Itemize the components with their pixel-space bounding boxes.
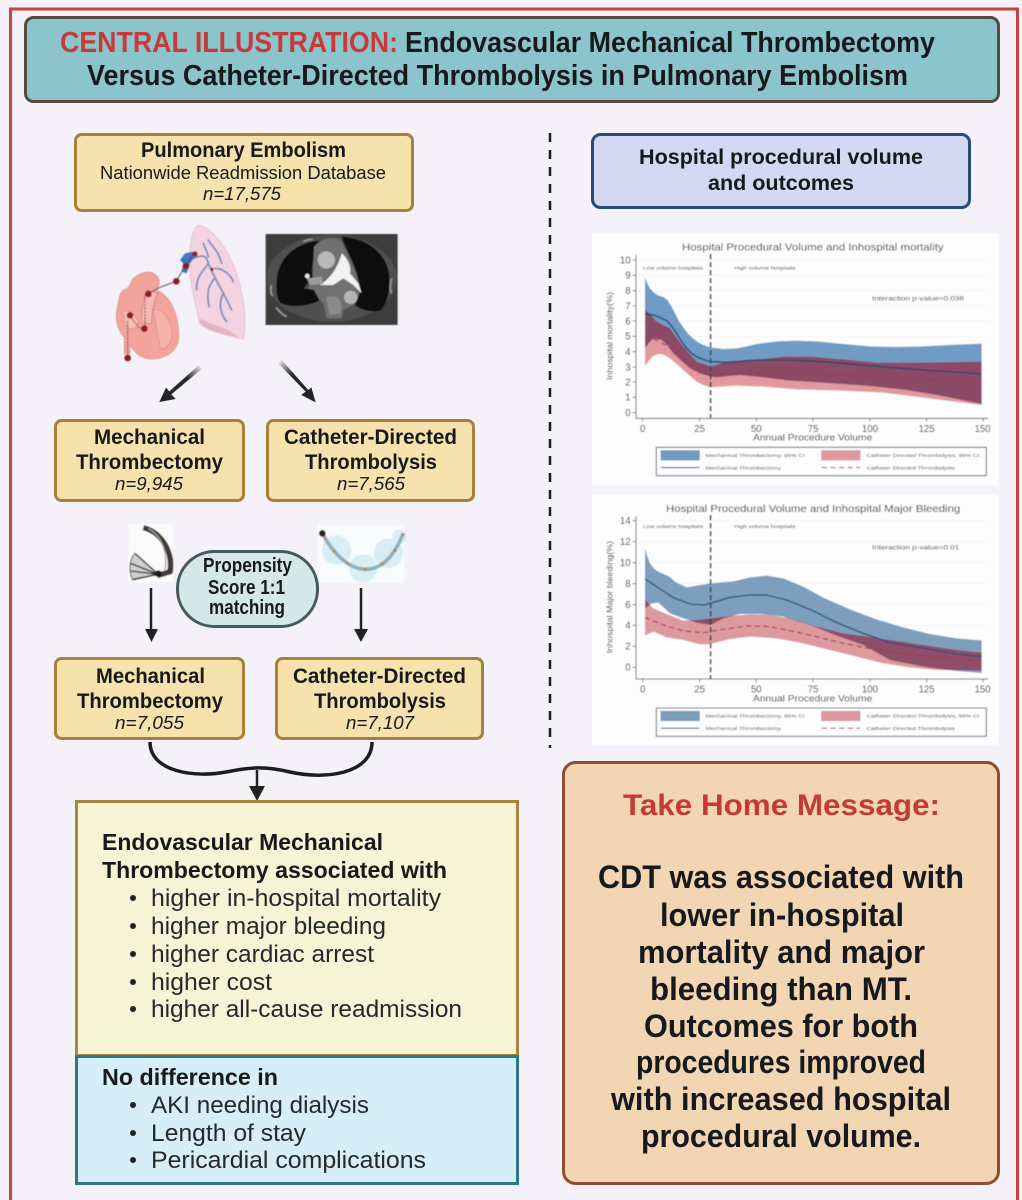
box: matched mechanical thrombectomy: Thrombectomy [77,690,223,713]
chart: inhospital mortality: Annual Procedure Volume [753,433,872,443]
chart: inhospital major bleeding: Low volume hospitals [643,524,704,530]
callout: propensity score matching: Propensity [203,555,293,577]
box: matched catheter-directed thrombolysis: n=7,107 [346,713,415,733]
panel: take home message: Outcomes for both [644,1008,918,1044]
axes: 4 [625,347,631,358]
band overlap [644,600,982,672]
panel: take home message: CDT was associated with [598,859,964,895]
axes: 9 [625,271,631,282]
image: CT scan [266,234,398,325]
panel: pulmonary embolism cohort: Nationwide Readmission Database [100,163,386,183]
confidence band: mechanical thrombectomy [645,548,982,673]
panel: mechanical thrombectomy findings [76,802,518,1056]
box: catheter-directed thrombolysis before matching: Thrombolysis [305,451,437,474]
panel: pulmonary embolism cohort [76,134,412,210]
legend: Catheter Directed Thrombolysis [867,465,956,471]
title banner: Versus Catheter-Directed Thrombolysis in Pulmonary Embolism [87,60,908,92]
legend: Catheter Directed Thrombolysis [867,726,956,732]
confidence band: catheter directed thrombolysis [645,309,982,405]
title banner [26,18,998,102]
chart: inhospital mortality [592,233,999,485]
panel: take home message: lower in-hospital [660,897,904,933]
box: catheter-directed thrombolysis before matching: n=7,565 [337,474,406,494]
line: catheter directed thrombolysis [645,617,982,661]
box: matched mechanical thrombectomy [56,658,244,738]
panel: no difference findings: Pericardial complications [151,1147,426,1174]
panel: mechanical thrombectomy findings: higher all-cause readmission [151,996,462,1023]
chart: inhospital mortality: Low volume hospitals [643,266,704,272]
panel: pulmonary embolism cohort: n=17,575 [203,184,282,204]
box: mechanical thrombectomy before matching [56,420,244,500]
axes: 0 [640,685,645,696]
panel: take home message: mortality and major [638,934,925,970]
arrow: merge connector [150,742,372,801]
axes: 12 [620,537,631,548]
axes: 5 [625,332,631,343]
confidence band: mechanical thrombectomy [645,278,982,404]
axes: 3 [625,362,631,373]
icon: heart and lung with embolus [116,225,245,361]
axes: 50 [751,685,762,696]
arrow: to catheter-directed thrombolysis [278,360,316,402]
arrow: to mechanical thrombectomy [159,365,202,402]
axes: 2 [625,642,631,653]
chart: inhospital major bleeding: Hospital Procedural Volume and Inhospital Major Bleeding [666,504,960,515]
icon: thrombectomy device [128,524,173,582]
axes: 125 [919,424,935,435]
axes: 100 [862,685,878,696]
axes: 10 [620,255,631,266]
chart: inhospital major bleeding: Interaction p-value=0.01 [872,545,960,551]
box: catheter-directed thrombolysis before matching [268,420,474,500]
confidence band: catheter directed thrombolysis [645,599,982,671]
callout: propensity score matching: Score 1:1 [208,577,285,599]
panel: no difference findings: Length of stay [151,1120,306,1147]
legend: Mechanical Thrombectomy [706,465,782,471]
panel: mechanical thrombectomy findings: higher major bleeding [151,913,386,940]
line: mechanical thrombectomy [645,313,982,374]
axes: 6 [625,316,631,327]
axes: 1 [625,393,631,404]
box: matched catheter-directed thrombolysis: Thrombolysis [314,690,446,713]
chart: inhospital major bleeding: High volume hospitals [734,524,796,530]
chart: inhospital major bleeding [592,494,999,746]
box: matched catheter-directed thrombolysis: Catheter-Directed [293,665,466,688]
panel: no difference findings: No difference in [102,1064,278,1090]
box: catheter-directed thrombolysis before matching: Catheter-Directed [284,426,457,449]
box: matched catheter-directed thrombolysis [276,658,482,738]
chart: inhospital major bleeding: Annual Procedure Volume [753,693,872,703]
axes: 125 [919,685,935,696]
heading: hospital procedural volume: and outcomes [708,172,854,195]
panel: take home message: procedures improved [636,1044,926,1080]
legend: Catheter Directed Thrombolysis, 95% CI [867,453,979,459]
axes: 100 [862,424,878,435]
panel: pulmonary embolism cohort: Pulmonary Embolism [141,139,346,162]
legend: Mechanical Thrombectomy, 95% CI [706,714,805,720]
line: mechanical thrombectomy [645,579,982,657]
axes: 14 [620,516,631,527]
axes: 0 [625,408,631,419]
panel: mechanical thrombectomy findings: higher cost [151,969,272,996]
axes: 75 [808,424,818,435]
axes: 8 [625,579,631,590]
axes: 10 [620,558,631,569]
axes: 25 [694,424,705,435]
axes: 150 [975,685,991,696]
axes: 50 [751,424,762,435]
chart: inhospital major bleeding: Inhospital Major bleeding(%) [605,541,615,653]
panel: mechanical thrombectomy findings: higher cardiac arrest [151,941,374,968]
axes: 75 [808,685,818,696]
legend [656,447,986,476]
axes: 25 [694,685,705,696]
panel: take home message [564,762,998,1184]
legend: Mechanical Thrombectomy, 95% CI [706,453,805,459]
axes [620,516,991,696]
heading: hospital procedural volume [592,134,970,208]
chart: inhospital mortality: High volume hospitals [734,266,796,272]
line: catheter directed thrombolysis [645,337,982,383]
arrow: thrombolysis down [354,588,368,642]
title banner: CENTRAL ILLUSTRATION: [60,27,398,59]
box: mechanical thrombectomy before matching: Thrombectomy [76,451,223,474]
axes: 8 [625,286,631,297]
axes: 150 [975,424,991,435]
box: mechanical thrombectomy before matching: Mechanical [94,426,205,449]
panel: no difference findings: AKI needing dialysis [151,1092,369,1119]
chart: inhospital mortality: Inhospital mortality(%) [605,292,615,380]
panel: no difference findings [76,1056,518,1184]
axes: 2 [625,377,631,388]
title banner: Endovascular Mechanical Thrombectomy [405,27,935,59]
chart: inhospital mortality: Hospital Procedural Volume and Inhospital mortality [682,243,944,254]
heading: hospital procedural volume: Hospital procedural volume [639,146,923,169]
panel: take home message: bleeding than MT. [650,971,912,1007]
band overlap [644,310,982,404]
panel: mechanical thrombectomy findings: higher in-hospital mortality [151,885,441,912]
arrow: thrombectomy down [145,588,158,642]
axes: 7 [625,301,631,312]
axes: 0 [640,424,645,435]
legend: Catheter Directed Thrombolysis, 95% CI [867,714,979,720]
legend [656,708,986,736]
callout: propensity score matching: matching [209,597,285,619]
legend: Mechanical Thrombectomy [706,726,782,732]
axes: 6 [625,600,631,611]
axes [620,255,991,435]
panel: mechanical thrombectomy findings: Thrombectomy associated with [102,857,447,883]
panel: take home message: procedural volume. [641,1118,921,1154]
chart: inhospital mortality: Interaction p-value=0.038 [872,297,965,303]
panel: take home message: with increased hospital [610,1081,951,1117]
axes: 4 [625,621,631,632]
panel: mechanical thrombectomy findings: Endovascular Mechanical [102,829,383,855]
callout: propensity score matching [178,552,318,626]
icon: catheter device [318,525,407,583]
panel: take home message: Take Home Message: [623,789,940,822]
box: matched mechanical thrombectomy: Mechanical [96,665,205,688]
box: mechanical thrombectomy before matching: n=9,945 [115,474,184,494]
axes: 0 [625,663,631,674]
box: matched mechanical thrombectomy: n=7,055 [115,713,185,733]
